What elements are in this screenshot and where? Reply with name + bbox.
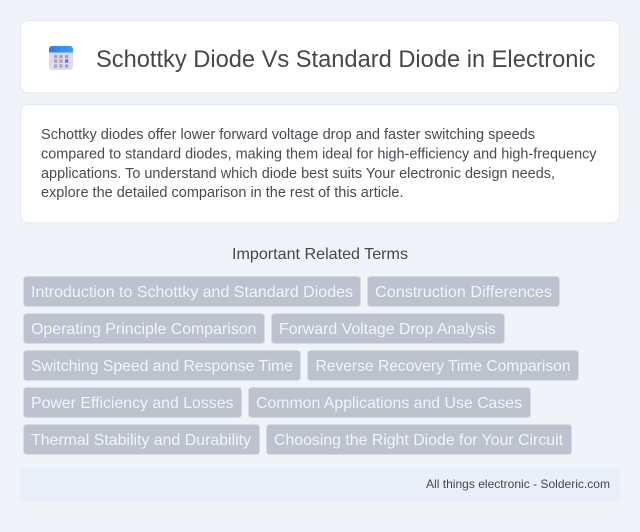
tag: operating principle [24, 314, 264, 344]
text block: intro paragraph: Schottky diodes offer lower forward voltage drop and faster switching speeds [41, 127, 535, 143]
tag: switching speed: Switching Speed and Response Time [31, 358, 293, 375]
tag: applications: Common Applications and Use Cases [256, 395, 522, 412]
tag: choosing diode [266, 424, 572, 454]
footer text: All things electronic - Solderic.com [426, 477, 610, 491]
tag: reverse recovery [308, 350, 578, 380]
tag: choosing diode: Choosing the Right Diode for Your Circuit [274, 432, 564, 449]
text block: intro paragraph: explore the detailed comparison in the rest of this article. [41, 185, 404, 201]
tag: introduction: Introduction to Schottky and Standard Diodes [31, 284, 353, 301]
tag: applications [248, 388, 530, 418]
tag: thermal stability [24, 424, 260, 454]
text block: intro paragraph: applications. To understand which diode best suits Your electronic design needs, [41, 166, 555, 182]
tag: forward voltage: Forward Voltage Drop Analysis [279, 321, 496, 338]
panel: header [20, 20, 620, 93]
text block: intro paragraph [41, 127, 597, 201]
panel: term tags [24, 276, 578, 454]
footer [20, 468, 620, 502]
heading: related terms: Important Related Terms [232, 246, 408, 263]
icon: calendar [49, 46, 73, 70]
tag: construction [368, 276, 560, 306]
panel: intro text [20, 104, 620, 223]
tag: reverse recovery: Reverse Recovery Time Comparison [316, 358, 570, 375]
title: Schottky Diode Vs Standard Diode in Electronic [96, 46, 596, 73]
tag: power efficiency: Power Efficiency and Losses [31, 395, 234, 412]
tag: forward voltage [272, 314, 504, 344]
tag: introduction [24, 276, 360, 306]
tag: power efficiency [24, 388, 242, 418]
tag: switching speed [24, 350, 300, 380]
text block: intro paragraph: compared to standard diodes, making them ideal for high-efficiency and high-frequency [41, 146, 597, 162]
tag: construction: Construction Differences [375, 284, 552, 301]
tag: thermal stability: Thermal Stability and Durability [31, 432, 251, 449]
tag: operating principle: Operating Principle Comparison [31, 321, 256, 338]
